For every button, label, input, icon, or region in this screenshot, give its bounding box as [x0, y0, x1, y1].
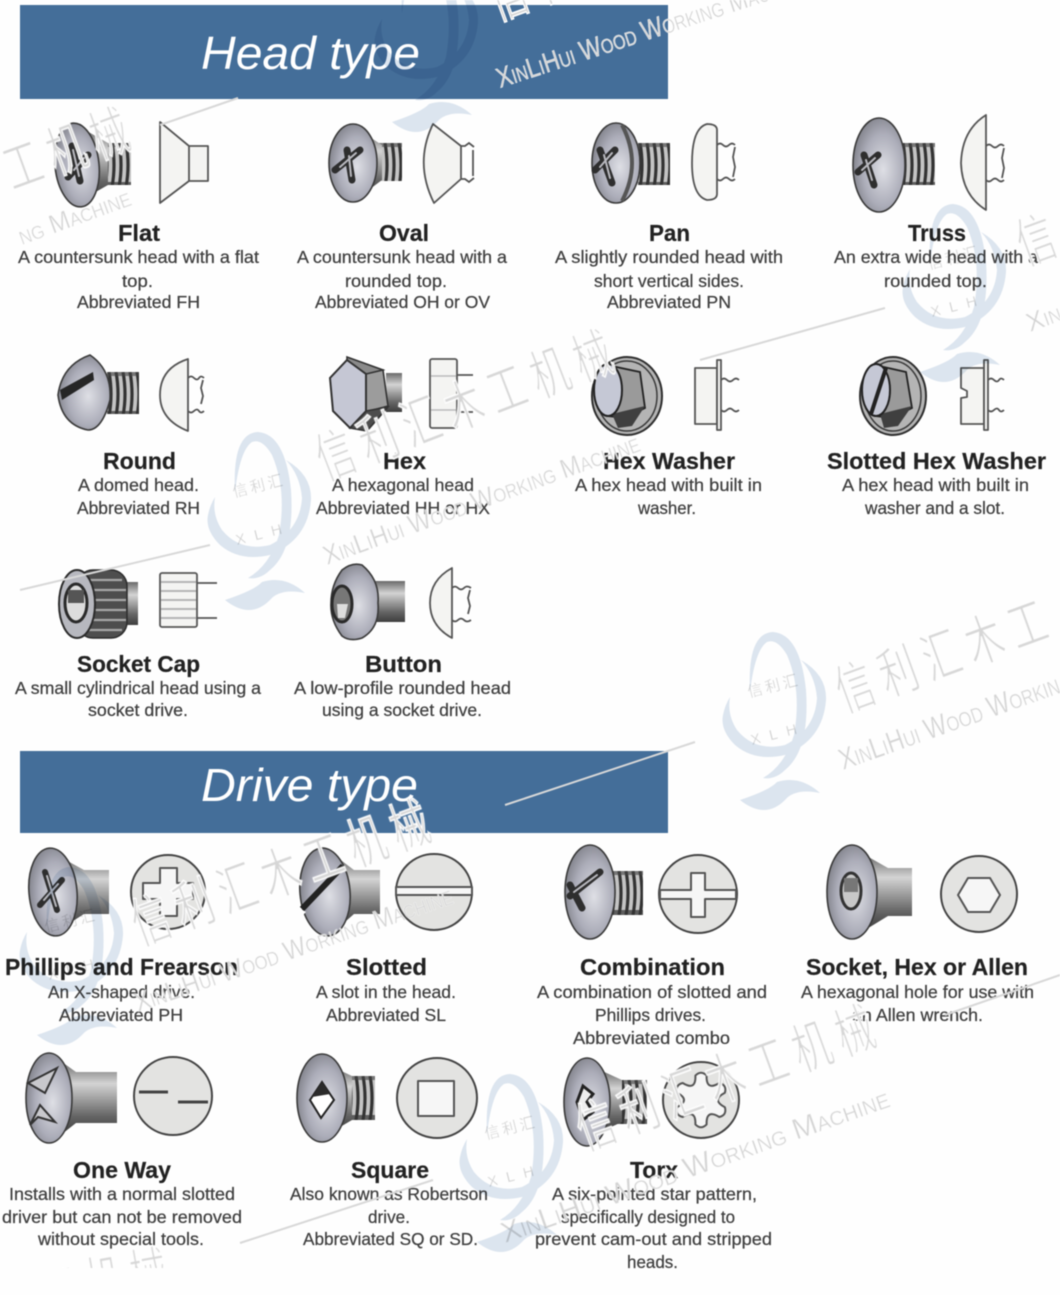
- text: Flat: [18, 220, 259, 312]
- text: Torx: heads.: [627, 1252, 678, 1272]
- text: Flat: Abbreviated FH: [77, 292, 200, 312]
- icon: square recess: [397, 1058, 477, 1138]
- text: Square: Square: [351, 1157, 429, 1183]
- watermark logo: top: [374, 0, 478, 132]
- text: Round: Abbreviated RH: [77, 498, 200, 518]
- icon: truss head screw: [853, 118, 935, 212]
- icon: round head screw: [58, 355, 139, 430]
- text: Socket, Hex or Allen: Socket, Hex or Allen: [806, 954, 1028, 980]
- watermark overlay: XinLiHui Wood Working Machine: [319, 428, 644, 571]
- watermark logo: center: [208, 432, 311, 610]
- icon: hex washer screw: [592, 357, 662, 435]
- watermark overlay: 信利汇木工机械: [307, 318, 629, 491]
- icon: truss head profile: [961, 115, 1004, 210]
- text: One Way: Installs with a normal slotted: [9, 1184, 235, 1204]
- text: Phillips and Frearson: An X-shaped drive.: [48, 982, 195, 1002]
- text: Socket, Hex or Allen: [801, 954, 1034, 1025]
- text: Pan: [555, 220, 783, 312]
- watermark logo: lower left: 信利汇: [43, 906, 99, 936]
- text: Combination: Abbreviated combo: [573, 1028, 730, 1048]
- text: Combination: Combination: [580, 954, 725, 980]
- text: One Way: without special tools.: [37, 1229, 204, 1249]
- icon: one way screw: [26, 1053, 117, 1143]
- icon: combination screw: [565, 845, 643, 939]
- text: Hex Washer: A hex head with built in: [575, 475, 762, 495]
- text: Combination: A combination of slotted and: [537, 982, 767, 1002]
- text: Combination: Phillips drives.: [595, 1005, 706, 1025]
- text: Pan: Abbreviated PN: [607, 292, 731, 312]
- watermark overlay: 信利汇木工: [827, 586, 1060, 723]
- watermark logo: right: [722, 632, 826, 810]
- text: One Way: driver but can not be removed: [2, 1207, 242, 1227]
- watermark overlay: 信利汇木工机械: [123, 788, 446, 956]
- text: One Way: [2, 1157, 242, 1249]
- text: Torx: prevent cam-out and stripped: [535, 1229, 772, 1249]
- icon: pan head profile: [692, 124, 735, 200]
- text: Socket Cap: Socket Cap: [77, 651, 200, 677]
- text: Hex: [316, 448, 490, 518]
- icon: round head profile: [160, 359, 204, 431]
- icon: socket screw: [827, 845, 912, 939]
- text: Truss: An extra wide head with a: [834, 247, 1038, 267]
- text: Oval: A countersunk head with a: [297, 247, 507, 267]
- icon: button head profile: [430, 568, 471, 638]
- text: Truss: rounded top.: [884, 271, 987, 291]
- icon: slotted hex washer screw: [860, 357, 926, 435]
- watermark logo: top right: [902, 204, 1006, 382]
- text: Truss: [834, 220, 1038, 291]
- icon: slot recess: [396, 854, 472, 930]
- watermark logo: top right: 信利汇: [926, 243, 982, 273]
- icon: pan head screw: [592, 123, 670, 203]
- text: Square: [290, 1157, 488, 1249]
- text: Socket Cap: A small cylindrical head using a: [15, 678, 261, 698]
- text: Oval: [297, 220, 507, 312]
- icon: phillips recess: [131, 855, 205, 929]
- text: Hex Washer: washer.: [637, 498, 696, 518]
- text: Torx: specifically designed to: [561, 1207, 735, 1227]
- banner: Drive type: [20, 751, 668, 833]
- text: Button: using a socket drive.: [322, 700, 482, 720]
- text: Hex: A hexagonal head: [332, 475, 474, 495]
- icon: torx screw: [564, 1058, 647, 1146]
- text: Pan: short vertical sides.: [594, 271, 744, 291]
- text: Pan: Pan: [649, 220, 690, 246]
- text: Socket Cap: [15, 651, 261, 720]
- watermark logo: lower center: 信利汇: [483, 1113, 539, 1143]
- text: Hex Washer: Hex Washer: [603, 448, 735, 474]
- icon: slotted screw: [296, 846, 380, 938]
- text: Oval: rounded top.: [345, 271, 447, 291]
- icon: flat head profile: [160, 122, 208, 203]
- icon: oval head profile: [424, 124, 474, 203]
- text: Button: Button: [365, 651, 442, 677]
- watermark logo: lower center: [460, 1074, 563, 1252]
- text: Slotted: Abbreviated SL: [326, 1005, 446, 1025]
- text: Slotted Hex Washer: [827, 448, 1046, 518]
- banner: Drive type: Drive type: [201, 759, 418, 811]
- text: Torx: A six-pointed star pattern,: [552, 1184, 757, 1204]
- icon: hex washer profile: [695, 360, 739, 430]
- watermark overlay: XinLiHui Wood Working Machine: [130, 880, 457, 1018]
- banner: Head type: [20, 5, 668, 99]
- text: Phillips and Frearson: Phillips and Frearson: [5, 954, 238, 980]
- icon: flat head screw: [51, 121, 131, 209]
- icon: one way recess: [134, 1057, 212, 1135]
- watermark overlay: XinLiHui Wood Working Machine: [497, 1083, 894, 1250]
- watermark logo: lower center: XLH: [486, 1161, 544, 1191]
- text: Socket Cap: socket drive.: [88, 700, 188, 720]
- watermark logo: lower left: XLH: [46, 954, 104, 984]
- icon: phillips screw: [25, 846, 109, 938]
- watermark logo: right: XLH: [749, 719, 807, 749]
- text: Hex: Hex: [383, 448, 426, 474]
- text: Pan: A slightly rounded head with: [555, 247, 783, 267]
- text: Slotted Hex Washer: Slotted Hex Washer: [827, 448, 1046, 474]
- icon: oval head screw: [329, 124, 402, 202]
- watermark logo: right: 信利汇: [746, 671, 802, 701]
- text: Torx: Torx: [630, 1157, 678, 1183]
- text: Torx: [535, 1157, 772, 1272]
- icon: torx recess: [663, 1062, 739, 1138]
- text: Slotted: [316, 954, 456, 1025]
- text: Combination: [537, 954, 767, 1048]
- text: Hex Washer: [575, 448, 762, 518]
- icon: button head screw: [331, 564, 405, 640]
- icon: socket cap profile: [160, 573, 217, 627]
- text: Phillips and Frearson: [5, 954, 238, 1025]
- text: Hex: Abbreviated HH or HX: [316, 498, 490, 518]
- watermark overlay: ng Machine: [14, 182, 135, 251]
- banner: Head type: Head type: [201, 27, 420, 79]
- text: Button: A low-profile rounded head: [294, 678, 511, 698]
- watermark logo: lower left: [20, 867, 123, 1045]
- icon: square screw: [297, 1054, 375, 1142]
- text: Slotted: A slot in the head.: [316, 982, 456, 1002]
- watermark logo: center: 信利汇: [231, 471, 287, 501]
- icon: hex recess: [941, 856, 1017, 932]
- icon: slotted hex washer profile: [961, 360, 1004, 430]
- text: Button: [294, 651, 511, 720]
- watermark logo: top right: XLH: [929, 291, 987, 321]
- text: Flat: Flat: [118, 220, 160, 246]
- text: Slotted: Slotted: [346, 954, 427, 980]
- text: Flat: A countersunk head with a flat: [18, 247, 259, 267]
- text: Phillips and Frearson: Abbreviated PH: [59, 1005, 183, 1025]
- text: Square: drive.: [368, 1207, 410, 1227]
- text: Square: Also known as Robertson: [290, 1184, 488, 1204]
- icon: combination recess: [659, 855, 737, 933]
- icon: hex head screw: [330, 357, 402, 431]
- text: Slotted Hex Washer: washer and a slot.: [864, 498, 1005, 518]
- text: Oval: Abbreviated OH or OV: [315, 292, 490, 312]
- text: Flat: top.: [122, 271, 153, 291]
- text: Square: Abbreviated SQ or SD.: [303, 1229, 478, 1249]
- text: One Way: One Way: [73, 1157, 171, 1183]
- text: Oval: Oval: [379, 220, 429, 246]
- watermark overlay: 信利汇木工机械: [568, 993, 891, 1161]
- icon: hex head profile: [430, 359, 473, 428]
- text: Slotted Hex Washer: A hex head with built in: [842, 475, 1029, 495]
- text: Round: Round: [103, 448, 176, 474]
- watermark logo: center: XLH: [234, 519, 292, 549]
- text: Round: [77, 448, 200, 518]
- text: Truss: Truss: [908, 220, 966, 246]
- text: Socket, Hex or Allen: A hexagonal hole for use with: [801, 982, 1034, 1002]
- text: Socket, Hex or Allen: an Allen wrench.: [852, 1005, 983, 1025]
- icon: socket cap screw: [59, 570, 138, 638]
- text: Round: A domed head.: [78, 475, 199, 495]
